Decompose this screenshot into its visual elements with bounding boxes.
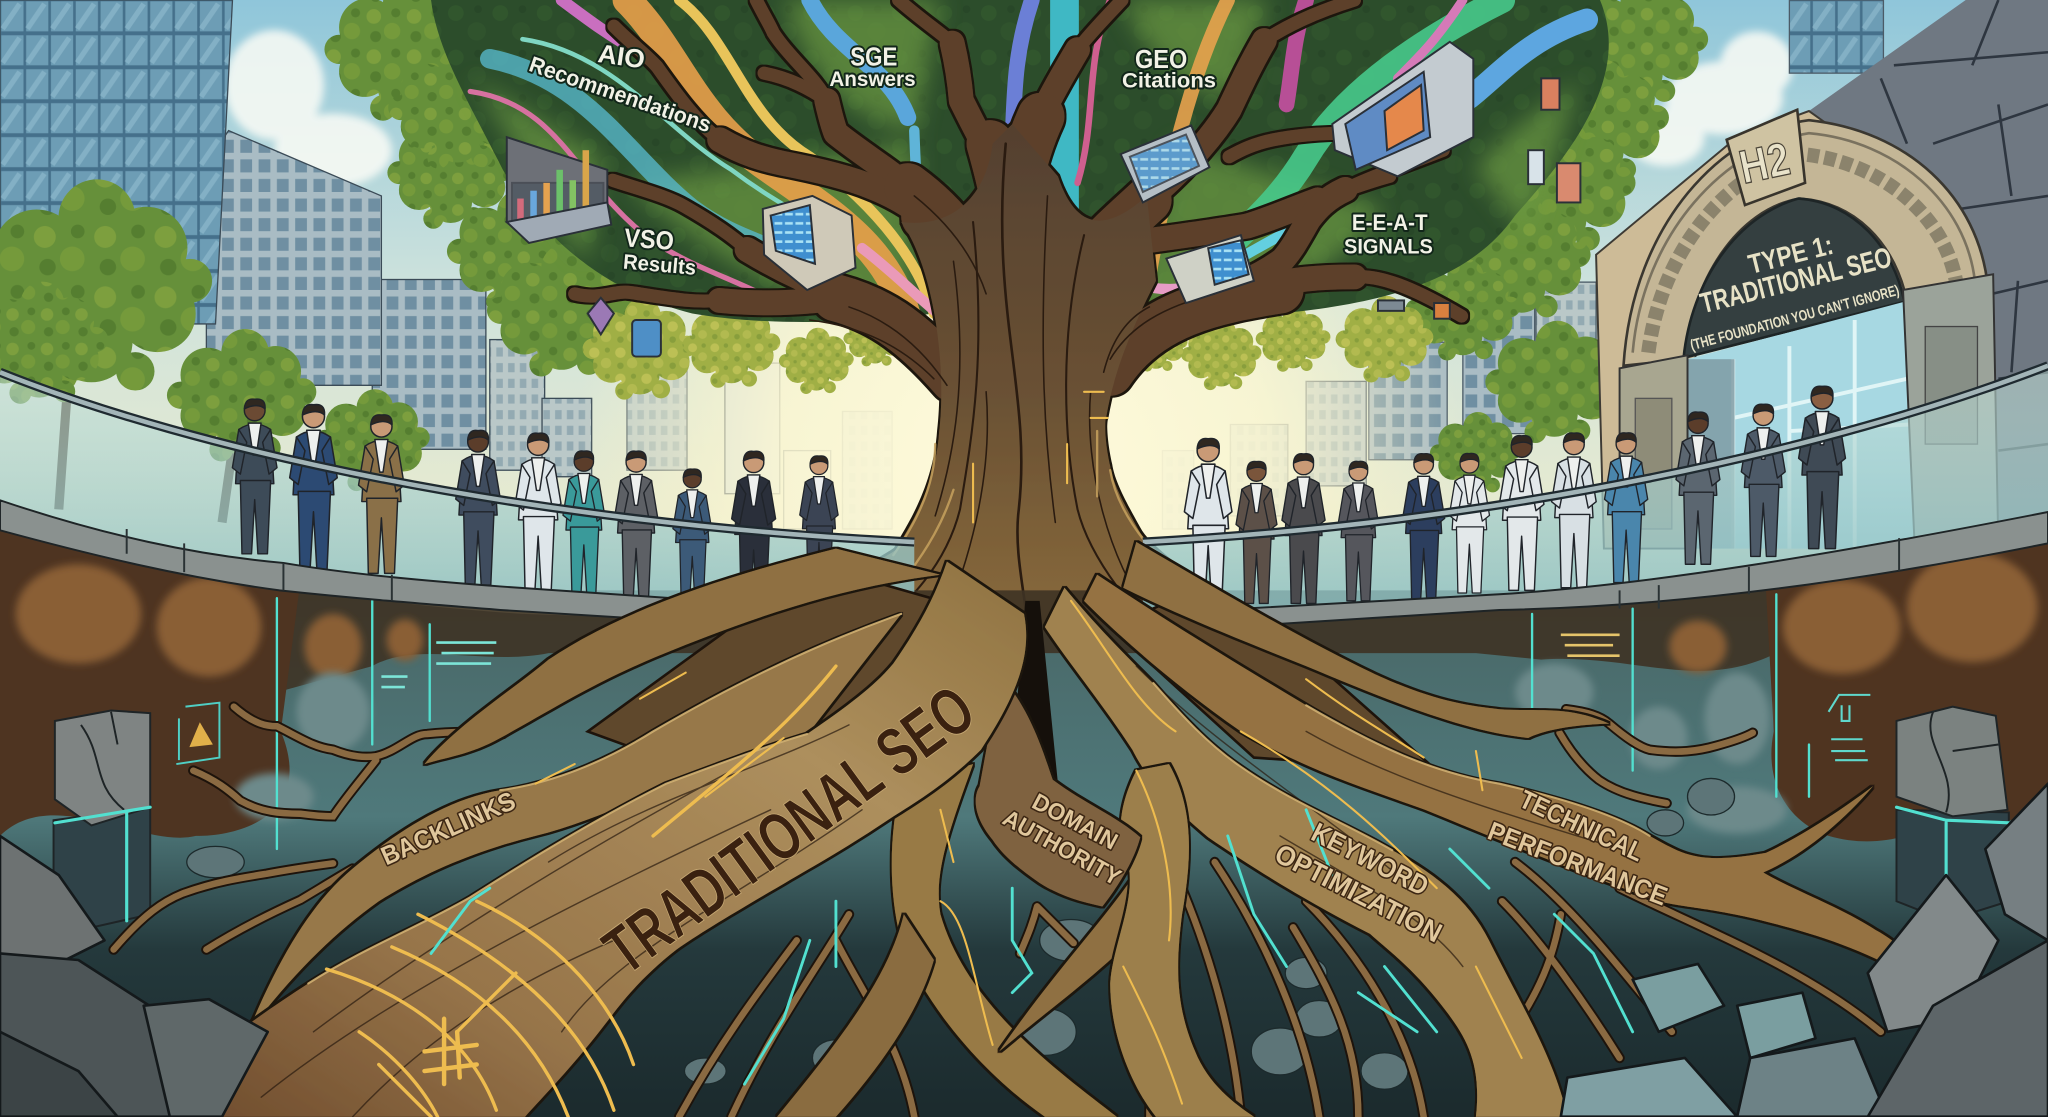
thin outer branch parts — [575, 0, 1462, 316]
root: backlinks — [248, 614, 901, 1032]
label: Authority: AUTHORITY — [999, 805, 1126, 891]
label: Backlinks: BACKLINKS — [376, 785, 520, 871]
thin secondary roots — [114, 707, 1881, 1117]
walkway — [0, 366, 2048, 627]
server box large — [1332, 42, 1473, 176]
label: Technical: TECHNICAL — [1515, 784, 1648, 867]
dark stone wall — [1809, 0, 2048, 549]
root: center right — [1110, 764, 1254, 1117]
label: Performance: PERFORMANCE — [1484, 816, 1672, 911]
canopy dark interior — [431, 0, 1609, 322]
railing and ledge — [0, 366, 2048, 635]
label: Keyword: KEYWORD — [1307, 817, 1434, 902]
label: VSO: VSO — [623, 222, 675, 256]
label: Domain: DOMAIN — [1028, 788, 1122, 855]
root: domain authority — [976, 679, 1140, 906]
canopy labels — [526, 38, 1433, 280]
street trees — [0, 179, 1623, 522]
label: E-E-A-T: E-E-A-T — [1352, 210, 1428, 235]
tree trunk and branches — [575, 0, 1462, 731]
label: Optimization: OPTIMIZATION — [1270, 838, 1447, 948]
rocks bottom left — [0, 836, 268, 1117]
tree canopy — [324, 0, 1708, 400]
clouds — [225, 30, 1793, 187]
dark central crack — [1008, 601, 1061, 810]
root network — [163, 542, 1933, 1117]
trunk highlight edges — [893, 431, 1208, 601]
gold glyph lines — [327, 392, 1522, 1117]
glass railing right — [1143, 366, 2048, 627]
label: AIO: AIO — [596, 38, 647, 74]
sky background — [0, 0, 2048, 653]
sunlight haze — [0, 0, 2048, 653]
mid branch parts — [720, 40, 1354, 303]
city buildings right — [1162, 0, 1883, 529]
server box GEO — [1121, 125, 1209, 202]
label: Answers: Answers — [829, 68, 916, 91]
heading: Type 1: TYPE 1: — [1745, 229, 1836, 280]
heading: H2: H2 — [1735, 131, 1794, 194]
city buildings left — [0, 0, 892, 529]
label: Results: Results — [622, 251, 697, 280]
root mass behind right — [1110, 588, 1437, 771]
heading: Traditional SEO: TRADITIONAL SEO — [1697, 242, 1895, 320]
stone pillars — [54, 707, 2009, 930]
root highlight edges — [308, 614, 1650, 984]
root: top right — [1123, 542, 1609, 738]
rocks bottom right — [1561, 784, 2048, 1117]
pillars — [1620, 355, 1688, 549]
circuit panels — [176, 594, 1870, 849]
root mass behind left — [588, 575, 1032, 784]
label: SGE: SGE — [850, 41, 897, 71]
label: Traditional SEO root: TRADITIONAL SEO — [590, 671, 989, 989]
glowing circuit traces — [431, 810, 1633, 1084]
root: center left — [892, 764, 1117, 1117]
glass door — [1688, 302, 1916, 549]
data streams — [470, 0, 1587, 320]
keystone — [1727, 110, 1805, 205]
servers and chart panels — [507, 42, 1580, 357]
root: technical performance — [1084, 575, 1933, 993]
server box SGE — [763, 196, 856, 290]
bark lines — [810, 144, 1215, 679]
root: lower right branch — [999, 862, 1156, 1051]
panel: stone archway — [1596, 0, 2048, 549]
root: keyword optimization — [1045, 588, 1567, 1117]
server box lower — [1166, 235, 1254, 303]
chart panel — [507, 137, 611, 243]
label: Citations: Citations — [1122, 70, 1216, 93]
arch tympanum — [1684, 199, 1904, 358]
root labels — [376, 671, 1672, 989]
label: Signals: SIGNALS — [1344, 235, 1433, 258]
label: Recommendations: Recommendations — [526, 52, 715, 137]
underground background — [0, 516, 2048, 1117]
root: upper left — [424, 549, 940, 764]
people left — [232, 399, 838, 603]
glass railing left — [0, 372, 914, 627]
tan wall — [1596, 111, 1855, 549]
thick branch parts — [836, 116, 1280, 379]
main trunk body — [771, 124, 1287, 731]
root bark texture — [261, 666, 1620, 1117]
label: GEO: GEO — [1135, 44, 1187, 74]
small icons — [588, 78, 1580, 357]
root: traditional SEO main — [163, 562, 1026, 1117]
people right — [1184, 386, 1845, 603]
arch band — [1624, 120, 1988, 366]
subheading: foundation: (THE FOUNDATION YOU CAN'T IGNORE) — [1689, 282, 1901, 354]
